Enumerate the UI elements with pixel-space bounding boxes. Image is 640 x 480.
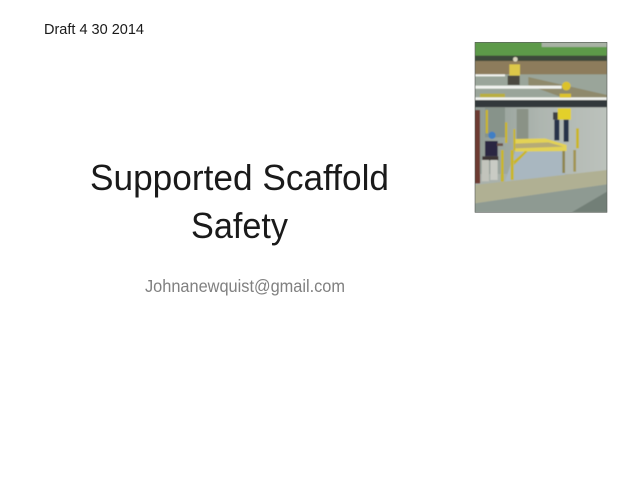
grass and horizon [475, 42, 607, 61]
dirt ground [475, 60, 607, 75]
far worker [508, 57, 520, 85]
lower wall [475, 107, 607, 182]
worker with blue helmet [482, 132, 503, 181]
email subtitle: Johnanewquist@gmail.com [145, 276, 345, 296]
red post [475, 110, 480, 183]
back wall and trench [475, 74, 607, 107]
near worker in yellow vest [553, 82, 571, 142]
title: Supported Scaffold [90, 157, 389, 198]
concrete ledge [475, 170, 607, 212]
title [90, 157, 389, 246]
scaffold frame [486, 110, 579, 182]
draft label: Draft 4 30 2014 [44, 22, 144, 38]
title: Safety [191, 205, 288, 246]
slide [45, 23, 608, 296]
photo: workers on scaffold [475, 42, 607, 212]
